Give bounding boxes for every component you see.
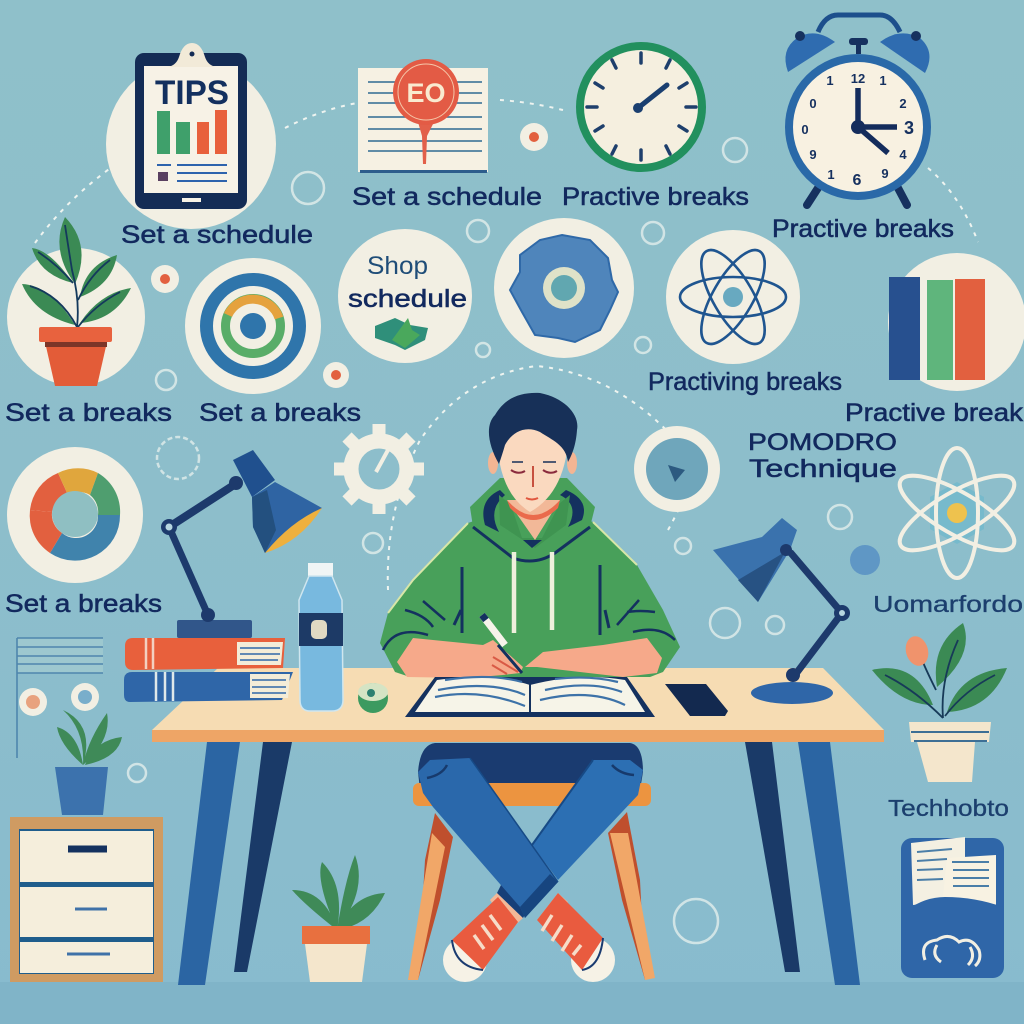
label: pomodoro technique <box>748 429 897 483</box>
arms <box>397 638 662 678</box>
icon: blue flower <box>494 218 634 358</box>
label: pomodoro technique: Technique <box>749 455 897 483</box>
icon: alarm clock: 3 <box>904 118 914 138</box>
icon: alarm clock: 12 <box>851 71 865 86</box>
icon: alarm clock: 0 <box>809 96 817 111</box>
icon: pie ring <box>7 447 143 583</box>
icon: potted plant left <box>7 217 145 386</box>
label: practive break right: Practive break <box>845 399 1024 427</box>
icon: gear <box>334 424 424 514</box>
icon: alarm clock: 1 <box>879 73 887 88</box>
head <box>488 393 577 512</box>
legs <box>418 758 643 918</box>
label: uomarfordo: Uomarfordo <box>873 591 1023 617</box>
pen <box>482 615 522 673</box>
icon: desk lamp left <box>161 450 322 638</box>
icon: alarm clock: 1 <box>827 167 835 182</box>
icon: books circle <box>888 253 1024 391</box>
panel: EO note card: EO <box>406 78 446 108</box>
icon: alarm clock: 6 <box>853 172 862 189</box>
label: practiving breaks: Practiving breaks <box>648 368 842 396</box>
icon: potted plant right <box>872 623 1007 782</box>
icon: folder with papers <box>901 837 1004 978</box>
panel: EO note card <box>358 59 488 173</box>
icon: green clock <box>580 46 702 168</box>
icon: stacked books <box>124 638 293 702</box>
label: pomodoro technique: POMODRO <box>748 429 897 456</box>
person upper body <box>380 393 680 678</box>
hoodie <box>380 478 680 677</box>
label: set a schedule 2: Set a schedule <box>352 183 542 211</box>
icon: alarm clock: 0 <box>801 122 809 137</box>
icon: atom right <box>890 448 1024 578</box>
desk legs <box>178 742 860 985</box>
label: techhobto: Techhobto <box>888 795 1009 821</box>
icon: alarm clock: 2 <box>899 96 907 111</box>
hips <box>418 743 643 790</box>
chair seat <box>413 783 651 806</box>
icon: drawer cabinet <box>10 817 163 982</box>
icon: water bottle <box>299 563 343 711</box>
label: set a schedule 1: Set a schedule <box>121 221 313 249</box>
label: practive breaks 2: Practive breaks <box>772 215 954 243</box>
decorative bubbles <box>128 138 852 943</box>
icon: atom circle <box>666 230 800 364</box>
label: practive breaks 1: Practive breaks <box>562 183 749 211</box>
icon: small potted plant <box>55 710 122 815</box>
label: set a breaks 2: Set a breaks <box>199 399 361 427</box>
open book <box>405 677 655 717</box>
panel: notes sheet <box>17 638 103 758</box>
icon: small lens circle <box>634 426 720 512</box>
panel: tips tablet <box>106 43 276 229</box>
panel: shop schedule: schedule <box>348 285 467 313</box>
shoes <box>443 893 615 982</box>
small green cup <box>358 683 388 713</box>
icon: alarm clock <box>785 15 929 205</box>
phone <box>665 684 728 716</box>
label: set a breaks 1: Set a breaks <box>5 399 172 427</box>
icon: floor plant <box>292 855 385 982</box>
desk <box>152 668 884 742</box>
label: set a breaks 3: Set a breaks <box>5 590 162 618</box>
panel: tips tablet: TIPS <box>155 74 229 112</box>
icon: alarm clock: 4 <box>899 147 907 162</box>
panel: shop schedule: Shop <box>367 252 428 280</box>
panel: shop schedule <box>338 229 472 363</box>
icon: alarm clock: 9 <box>809 147 817 162</box>
chair <box>408 812 655 980</box>
icon: target <box>185 258 321 394</box>
icon: alarm clock: 9 <box>881 166 889 181</box>
icon: alarm clock: 1 <box>826 73 834 88</box>
icon: desk lamp right <box>713 518 850 704</box>
